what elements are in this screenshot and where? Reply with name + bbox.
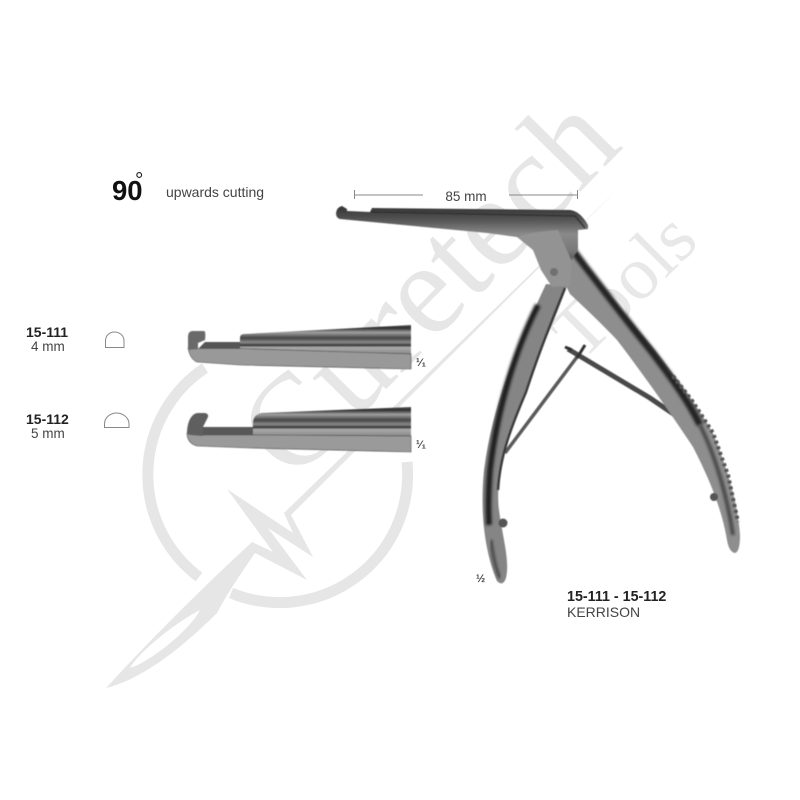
left handle body <box>483 284 567 583</box>
jaw upper body <box>240 325 411 356</box>
right handle body <box>548 232 740 553</box>
label: 15-112 5 mm <box>26 411 69 441</box>
right handle stud <box>710 493 718 501</box>
watermark word Tools: Tools <box>535 196 713 374</box>
jaw lower face <box>187 433 411 452</box>
detail: 15-112 jaw <box>187 407 411 452</box>
icon: 4 mm half-round profile <box>106 332 124 348</box>
spring pin <box>565 345 585 358</box>
jaw lower face <box>188 348 411 369</box>
scale 1:1: ¹⁄₁ <box>416 357 426 369</box>
upper shaft <box>336 206 588 262</box>
dimension: 85 mm <box>354 189 578 204</box>
subheading: upwards cutting <box>166 184 264 200</box>
watermark needle and pulse line <box>106 187 620 688</box>
left handle tip shade <box>491 540 500 578</box>
product caption: KERRISON <box>567 604 640 620</box>
label: 15-112 5 mm: 15-112 <box>26 411 69 427</box>
jaw upper body <box>253 407 411 438</box>
product caption: 15-111 - 15-112 <box>567 589 666 605</box>
left handle thumb stud <box>498 518 508 528</box>
label: 15-111 4 mm: 4 mm <box>31 339 65 354</box>
detail: 15-111 jaw <box>188 325 411 369</box>
label: 15-112 5 mm: 5 mm <box>31 426 65 441</box>
icon: 5 mm half-round profile <box>104 413 129 428</box>
right handle dark band <box>561 234 700 425</box>
product caption <box>567 589 666 620</box>
left handle inner edge <box>498 288 565 490</box>
label: 15-111 4 mm <box>26 324 68 354</box>
dimension: 85 mm: 85 mm <box>445 189 487 204</box>
left handle dark band <box>488 305 538 525</box>
watermark word Curetech: Curetech <box>210 65 645 504</box>
moving right handle <box>548 232 740 553</box>
jaw slot <box>203 427 253 435</box>
jaw slot <box>199 342 240 349</box>
scale 1:2: ½ <box>476 573 485 585</box>
fixed left handle <box>483 284 567 583</box>
scale 1:1: ¹⁄₁ <box>416 439 426 451</box>
left spring <box>505 357 577 453</box>
shaft dark groove <box>371 212 585 228</box>
pivot plate <box>517 230 572 287</box>
instrument: Kerrison rongeur <box>336 206 740 583</box>
right handle knurling <box>673 376 738 522</box>
pivot rivet <box>550 268 558 276</box>
heading: 90 degrees: ° <box>135 169 143 192</box>
watermark: Curetech Tools logo <box>106 65 713 688</box>
right handle lower shade <box>700 425 733 535</box>
jaw hook <box>187 413 208 436</box>
right spring <box>568 349 696 445</box>
label: 15-111 4 mm: 15-111 <box>26 324 68 340</box>
heading: 90 degrees: 90 <box>112 175 143 206</box>
jaw hook <box>188 331 205 350</box>
watermark ring <box>148 368 408 603</box>
